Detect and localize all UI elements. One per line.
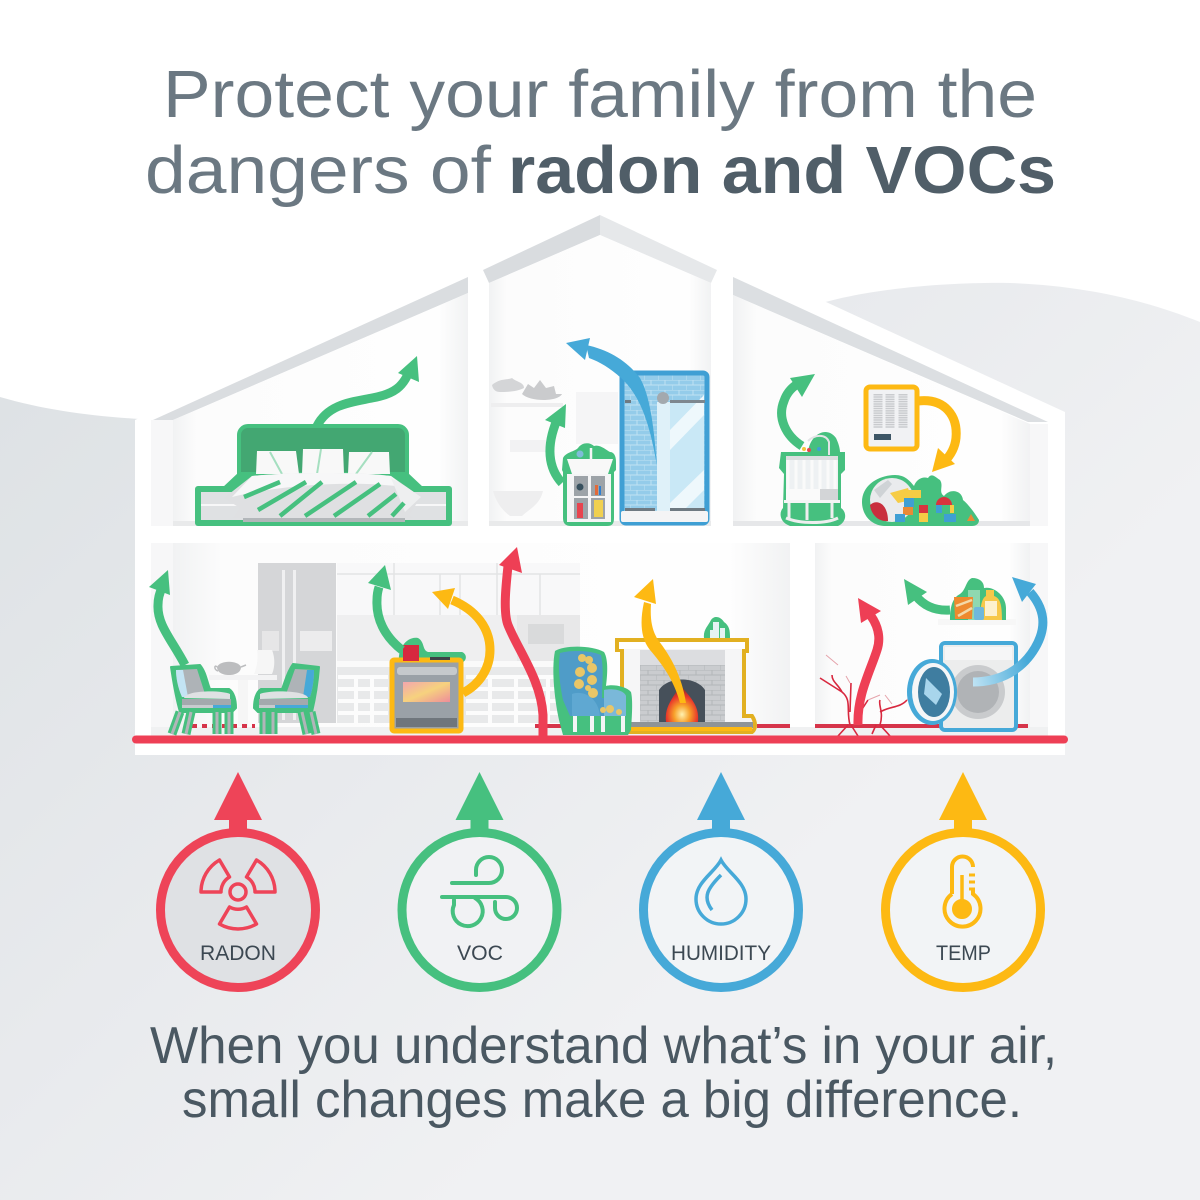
label: temp: TEMP: [936, 942, 991, 965]
arrow: bed VOC: [317, 356, 419, 426]
arrow: dining VOC: [149, 570, 185, 665]
armchair: [553, 647, 632, 735]
duvet: [224, 473, 421, 518]
closing message: small changes make a big difference.: [182, 1071, 1022, 1129]
radon cracks: [820, 655, 915, 736]
bathroom backdrop: [491, 378, 618, 516]
dining chair left: [171, 665, 236, 734]
arrow: fireplace temperature: [634, 579, 686, 703]
title: [145, 57, 1056, 208]
title: radon and VOCs: [508, 133, 1056, 208]
arrow: heater temperature: [918, 401, 956, 472]
arrow: shower humidity: [566, 338, 657, 466]
label: radon: RADON: [200, 942, 276, 965]
kitchen backdrop: [209, 563, 580, 726]
title: dangers of: [145, 133, 491, 208]
shower: [621, 373, 708, 523]
icon: water drop: [696, 860, 746, 924]
sink cabinet: [562, 443, 616, 526]
arrow: central radon: [499, 547, 543, 736]
red foundation line: [136, 736, 1064, 744]
sensor: VOC: [402, 772, 557, 988]
arrow: crib VOC: [782, 374, 815, 446]
washing machine: [907, 643, 1016, 730]
arrow: dryer humidity: [973, 577, 1043, 682]
label: humidity: HUMIDITY: [671, 942, 771, 965]
house structure: [135, 198, 1065, 755]
arrow: shelf VOC: [904, 579, 950, 610]
toys: [862, 475, 979, 526]
fireplace: [612, 617, 755, 732]
icon: wind: [442, 857, 517, 926]
arrow: sink VOC: [545, 404, 566, 483]
icon: thermometer: [944, 856, 980, 927]
laundry shelf products: [938, 578, 1016, 625]
sensor: radon: [160, 772, 316, 988]
icon: radiation: [201, 860, 275, 929]
sensor: temperature: [886, 772, 1040, 988]
pillows: [256, 449, 390, 474]
closing message: When you understand what’s in your air,: [150, 1017, 1057, 1075]
arrow: stove temperature: [432, 588, 490, 693]
title: Protect your family from the: [163, 57, 1037, 132]
label: VOC: VOC: [457, 942, 503, 965]
wall heater: [866, 387, 917, 449]
dining chair right: [254, 664, 319, 734]
sensor: humidity: [644, 772, 798, 988]
crib: [779, 432, 845, 526]
inner red floor line: [192, 724, 1028, 728]
arrow: crawl space radon: [858, 598, 881, 725]
bed: [195, 426, 452, 526]
dining table: [209, 650, 277, 726]
arrow: stove VOC: [368, 565, 402, 650]
closing message: [150, 1017, 1057, 1129]
stove: [392, 638, 466, 731]
